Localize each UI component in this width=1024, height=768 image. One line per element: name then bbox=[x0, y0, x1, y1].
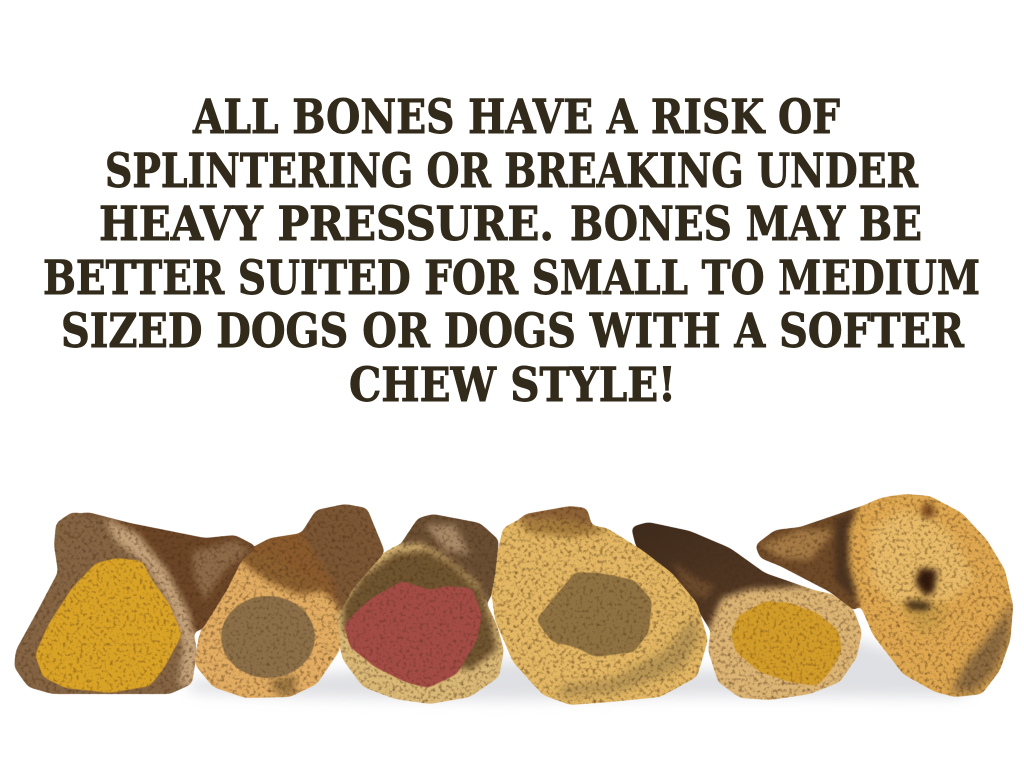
bone 3 body bbox=[334, 514, 504, 704]
heading text: BONES MAY BE bbox=[570, 197, 922, 252]
bone 3: red filling bbox=[334, 514, 504, 704]
bone 2: tan filling bbox=[195, 504, 385, 698]
bone 4 filling bbox=[536, 572, 652, 657]
bone 5 body bbox=[631, 522, 862, 700]
bone 1 body bbox=[14, 510, 258, 694]
ground shadow bbox=[190, 640, 985, 700]
heading text: HEAVY PRESSURE. bbox=[99, 197, 554, 252]
heading text: CHEW STYLE! bbox=[349, 358, 676, 413]
bone 4 body bbox=[491, 506, 708, 705]
bone 2 filling bbox=[221, 596, 315, 678]
bone 4: back stub and large cut face bbox=[491, 506, 708, 705]
photo: row of six filled marrow bones bbox=[14, 494, 1013, 705]
bone 1: yellow filling bbox=[14, 510, 258, 694]
heading text: ALL BONES HAVE A RISK OF bbox=[192, 90, 840, 145]
bone 2 body bbox=[195, 504, 385, 698]
bone 1 filling bbox=[35, 558, 182, 693]
bone 5: dark shaft with yellow filling bbox=[631, 522, 862, 700]
bone 5 filling bbox=[731, 601, 842, 686]
bone 6: far right, cut face with hole bbox=[755, 494, 1013, 697]
heading text bbox=[43, 90, 980, 413]
bone 3 filling bbox=[344, 581, 482, 688]
